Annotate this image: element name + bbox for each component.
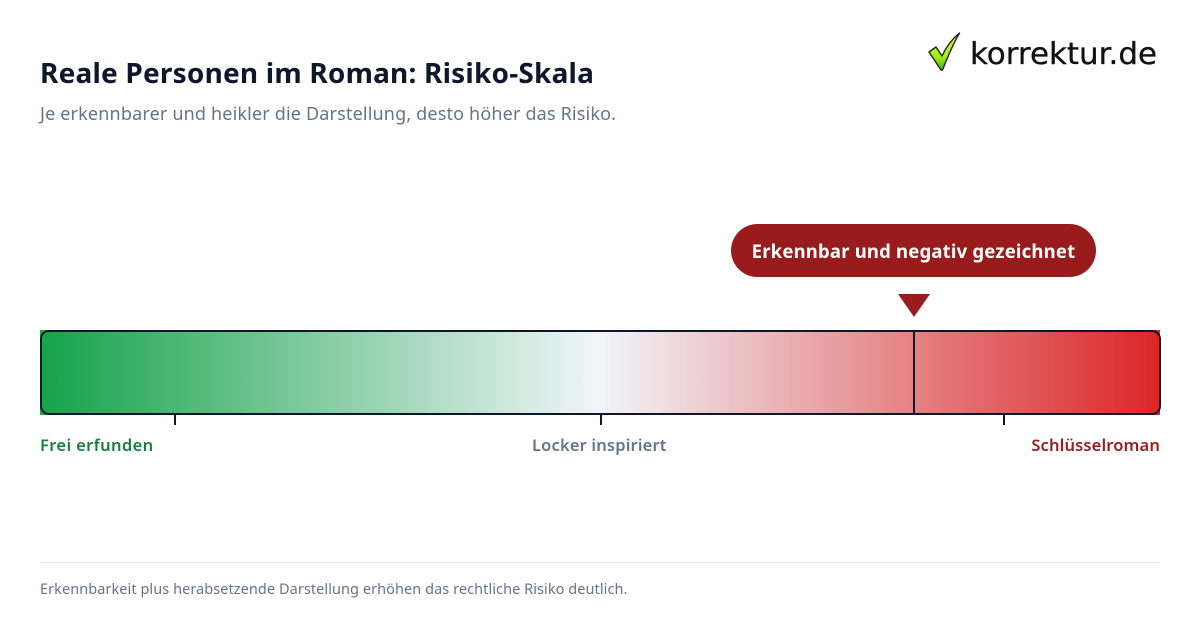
footer note: Erkennbarkeit plus herabsetzende Darstellung erhöhen das rechtliche Risiko deutlich. <box>40 579 627 599</box>
label: Locker inspiriert: Locker inspiriert <box>532 433 667 456</box>
marker line <box>913 331 915 414</box>
callout: marker label <box>731 224 1096 277</box>
label: Schlüsselroman: Schlüsselroman <box>1031 433 1160 456</box>
tick: left <box>174 415 176 425</box>
icon: green check mark <box>929 33 960 70</box>
tick: middle <box>600 415 602 425</box>
logo: korrektur.de <box>928 32 1157 72</box>
tick: right <box>1003 415 1005 425</box>
label: Frei erfunden: Frei erfunden <box>40 433 154 456</box>
marker triangle <box>898 294 930 317</box>
gradient bar <box>40 330 1160 415</box>
logo wordmark: korrektur.de <box>970 37 1157 72</box>
title: Reale Personen im Roman: Risiko-Skala <box>40 54 594 92</box>
subtitle: Je erkennbarer und heikler die Darstellung, desto höher das Risiko. <box>40 102 616 126</box>
callout: marker label: Erkennbar und negativ gezeichnet <box>752 239 1075 264</box>
